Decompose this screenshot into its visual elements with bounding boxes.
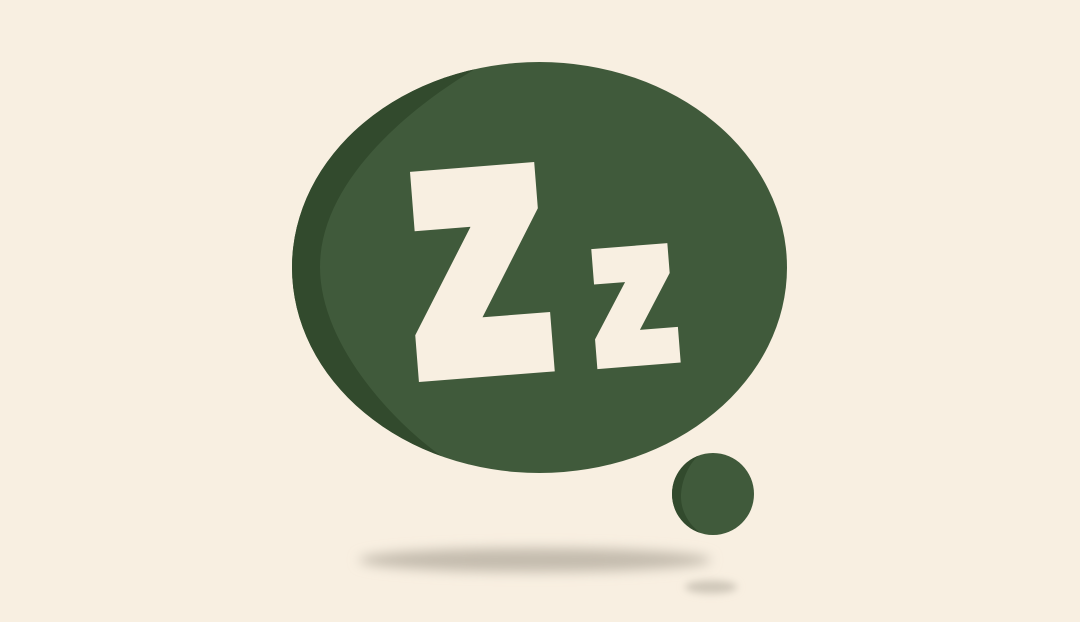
small thought bubble [672,453,754,535]
bubble dark crescent [292,69,475,456]
speech bubble [280,50,787,490]
letter: large Z: Z [405,120,552,422]
small bubble dark crescent [672,456,700,533]
ground shadow of small bubble [685,580,737,594]
letter: small z: z [583,176,683,403]
ground shadow of speech bubble [359,548,711,572]
